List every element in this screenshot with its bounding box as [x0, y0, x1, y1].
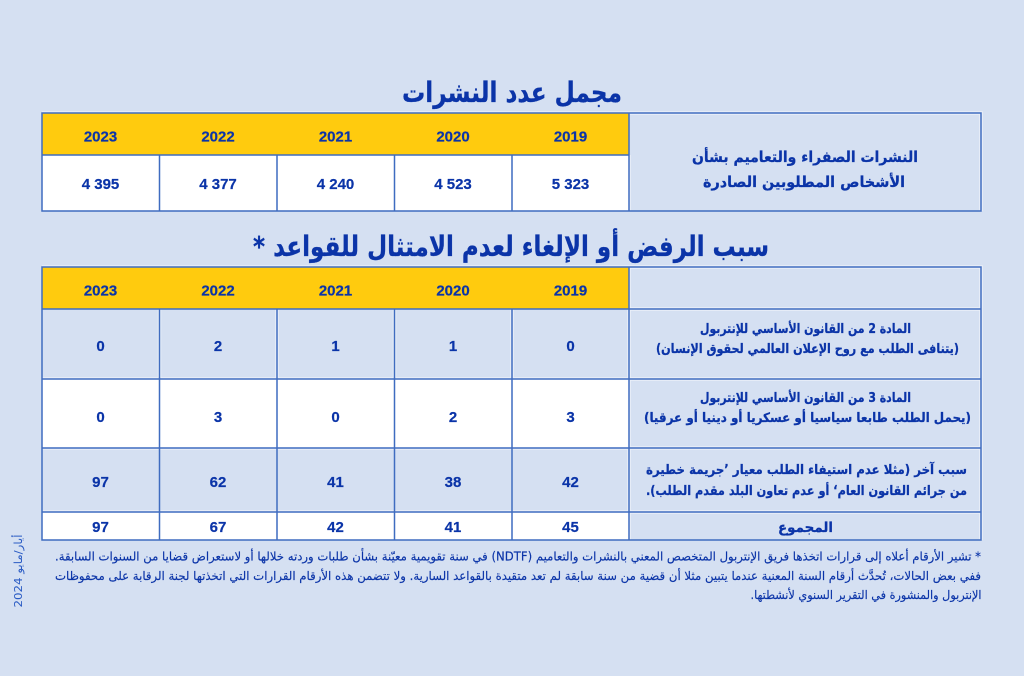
year labels: 2023	[84, 282, 117, 300]
values row: 4 377	[199, 176, 237, 193]
year labels: 2020	[436, 282, 470, 300]
row: total values: 97	[92, 519, 109, 536]
row label: other reason: سبب آخر (مثلا عدم استيفاء الطلب معيار ’جريمة خطيرة	[646, 461, 967, 478]
year labels: 2019	[554, 128, 587, 146]
row: article 2 values: 1	[331, 338, 340, 355]
row: article 2 values	[96, 338, 575, 355]
values row: 4 240	[317, 176, 354, 193]
values row	[82, 176, 589, 193]
row: article 3 values: 0	[96, 409, 105, 426]
row label: article 3: المادة 3 من القانون الأساسي للإنتربول	[700, 389, 911, 406]
white value cells	[42, 155, 629, 211]
row label: red notices and diffusions	[692, 147, 918, 191]
footnote: * تشير الأرقام أعلاه إلى قرارات اتخذها فريق الإنتربول المتخصص المعني بالنشرات والتعاميم (NDTF) في سنة تقويمية معيّنة بشأن طلبات وردته خلالها أو لاستعراض قضايا من السنوات السابقة.	[55, 548, 981, 564]
year labels: 2021	[319, 128, 352, 146]
title: total notices: مجمل عدد النشرات	[402, 76, 622, 109]
year labels: 2022	[201, 282, 235, 300]
row: article 2 values: 0	[96, 338, 105, 355]
row label: other reason	[646, 461, 967, 499]
row label: article 2	[656, 320, 959, 357]
row: total values: 42	[327, 519, 344, 536]
row label: other reason: من جرائم القانون العام‘ أو عدم تعاون البلد مقدم الطلب).	[646, 482, 967, 499]
values row: 4 523	[434, 176, 472, 193]
date stamp: أيار/مايو 2024	[11, 534, 25, 608]
values row: 5 323	[552, 176, 589, 193]
footnote	[55, 548, 981, 603]
row label: article 3	[644, 389, 971, 426]
row: other reason values: 97	[92, 474, 109, 491]
white row: article 3	[42, 379, 629, 448]
row label: total: المجموع	[778, 520, 833, 536]
values row: 4 395	[82, 176, 119, 193]
title: reason for refusal or cancellation: سبب الرفض أو الإلغاء لعدم الامتثال للقواعد *	[253, 228, 769, 263]
row: other reason values	[92, 474, 579, 491]
row: article 2 values: 0	[566, 338, 575, 355]
row label: article 2: (يتنافى الطلب مع روح الإعلان العالمي لحقوق الإنسان)	[656, 342, 959, 357]
year labels: 2021	[319, 282, 352, 300]
year header band	[42, 267, 629, 309]
row: article 3 values: 3	[214, 409, 222, 426]
row label: red notices and diffusions: الأشخاص المطلوبين الصادرة	[703, 173, 905, 191]
row: article 3 values: 0	[331, 409, 340, 426]
row: article 2 values: 2	[214, 338, 222, 355]
row: article 3 values: 2	[449, 409, 457, 426]
row: article 2 values: 1	[449, 338, 457, 355]
row: other reason values: 62	[210, 474, 226, 491]
year labels: 2022	[201, 128, 235, 146]
row: other reason values: 42	[562, 474, 579, 491]
row: article 3 values	[96, 409, 575, 426]
footnote: الإنتربول والمنشورة في التقرير السنوي لأنشطتها.	[750, 587, 982, 603]
row label: red notices and diffusions: النشرات الصفراء والتعاميم بشأن	[692, 147, 918, 166]
panel: refusal reasons table	[42, 267, 981, 540]
year header band	[42, 113, 629, 155]
year labels: 2023	[84, 128, 117, 146]
row: article 3 values: 3	[566, 409, 575, 426]
row: total values: 45	[562, 519, 579, 536]
year labels: 2020	[436, 128, 470, 146]
row label: article 2: المادة 2 من القانون الأساسي للإنتربول	[700, 320, 911, 337]
row: other reason values: 41	[327, 474, 344, 491]
year labels	[84, 128, 587, 146]
row: other reason values: 38	[445, 474, 461, 491]
white row: total	[42, 512, 629, 540]
row: total values: 67	[210, 519, 226, 536]
year labels: 2019	[554, 282, 587, 300]
year labels	[84, 282, 587, 300]
footnote: ففي بعض الحالات، تُحدَّث أرقام السنة المعنية عندما يتبين مثلا أن قضية من سنة سابقة لم تعد متقيدة بالقواعد السارية. ولا تتضمن هذه الأرقام القرارات التي اتخذتها لجنة الرقابة على محفوظات	[55, 568, 981, 584]
panel: total notices table	[42, 113, 981, 211]
row: total values	[92, 519, 579, 536]
row label: article 3: (يحمل الطلب طابعا سياسيا أو عسكريا أو دينيا أو عرقيا)	[644, 409, 971, 426]
row: total values: 41	[445, 519, 461, 536]
